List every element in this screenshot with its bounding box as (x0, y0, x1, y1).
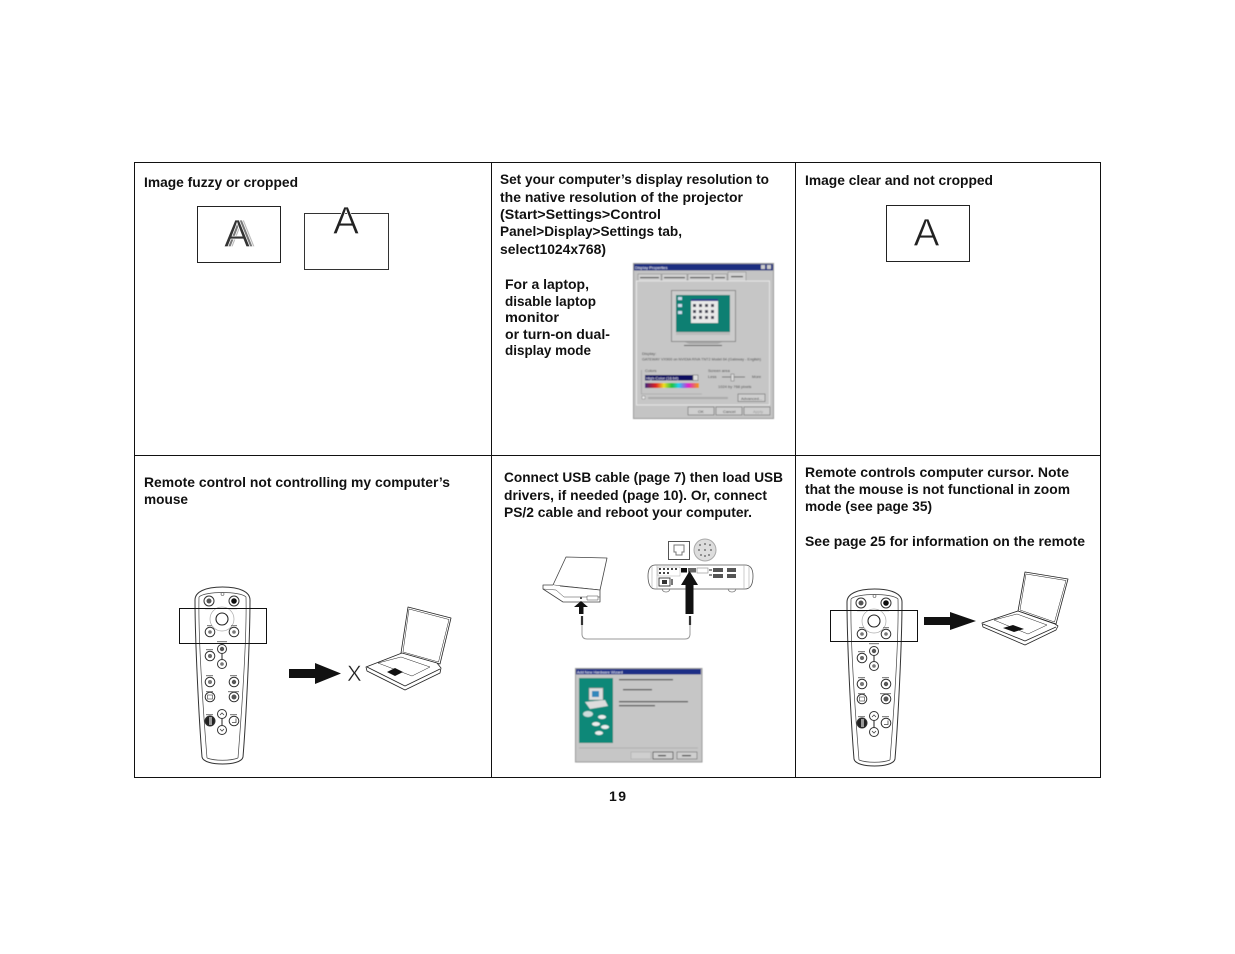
screenshot: display properties dialog: High Color (16 bit) (646, 376, 679, 380)
heading: remote problem (144, 474, 450, 507)
text: remote cursor note (805, 464, 1085, 549)
screenshot: add new hardware wizard: Add New Hardware Wizard (577, 670, 623, 674)
text: remote cursor note: that the mouse is not functional in zoom (805, 481, 1070, 497)
text: laptop note: display mode (505, 342, 591, 358)
panel: image fuzzy or cropped (144, 174, 388, 270)
heading: image fuzzy: Image fuzzy or cropped (144, 174, 298, 190)
icon: remote control (847, 589, 902, 766)
text: laptop note: monitor (505, 309, 560, 325)
icon: clear letter A (886, 206, 970, 262)
screenshot: display properties dialog: Apply (753, 409, 763, 414)
text: USB instructions: drivers, if needed (page 10). Or, connect (504, 487, 767, 503)
panel: remote controls cursor (805, 464, 1085, 766)
screenshot: display properties dialog: 1024 by 768 pixels (718, 384, 751, 389)
icon: fuzzy letter A: A (227, 213, 253, 256)
icon: cropped letter A (304, 200, 388, 270)
screenshot: display properties dialog: Cancel (723, 409, 736, 414)
screenshot: display properties dialog: Display Properties (635, 265, 667, 270)
screenshot: add new hardware wizard (576, 668, 702, 762)
text: USB instructions: PS/2 cable and reboot your computer. (504, 504, 752, 520)
arrow: remote to laptop (924, 612, 976, 630)
arrow: remote to laptop (289, 663, 341, 684)
text: laptop note (505, 276, 610, 358)
text: laptop note: disable laptop (505, 293, 596, 309)
icon: remote control (195, 587, 250, 764)
panel: remote not controlling mouse (144, 474, 451, 764)
icon: fuzzy letter A: A (229, 213, 255, 256)
text: resolution instructions: the native resolution of the projector (500, 189, 744, 205)
screenshot: display properties dialog: Screen area (708, 368, 731, 373)
page number: 19 (609, 788, 626, 804)
screenshot: display properties dialog: More (752, 374, 762, 379)
arrow: to projector USB port (681, 571, 698, 614)
screenshot: display properties dialog (634, 264, 774, 418)
screenshot: display properties dialog: GATEWAY VX900 on NVIDIA RIVA TNT2 Model 64 (Gateway - English) (642, 356, 762, 362)
highlight box on remote (180, 608, 266, 644)
text: remote cursor note: mode (see page 35) (805, 498, 932, 514)
highlight box on remote (830, 610, 918, 642)
screenshot: display properties dialog: Advanced... (741, 396, 762, 401)
icon: USB connector (668, 542, 690, 560)
icon: laptop side view (543, 557, 607, 602)
text: resolution instructions: select1024x768) (500, 241, 606, 257)
text: laptop note: or turn-on dual- (505, 326, 610, 342)
text: resolution instructions (500, 171, 769, 257)
text: resolution instructions: (Start>Settings>Control (500, 206, 661, 222)
icon: fuzzy letter A (198, 206, 280, 262)
text: resolution instructions: Panel>Display>Settings tab, (500, 223, 682, 239)
text: remote cursor note: See page 25 for information on the remote (805, 533, 1085, 549)
screenshot: display properties dialog: Display: (642, 351, 656, 356)
screenshot: display properties dialog: Less (708, 374, 716, 379)
icon: X mark: X (347, 661, 362, 686)
arrow: to laptop USB port (574, 601, 588, 614)
text: USB instructions: Connect USB cable (page 7) then load USB (504, 469, 783, 485)
USB cable (582, 616, 690, 639)
text: remote cursor note: Remote controls computer cursor. Note (805, 464, 1069, 480)
panel: connect USB cable (504, 469, 783, 762)
text: laptop note: For a laptop, (505, 276, 589, 292)
text: resolution instructions: Set your computer’s display resolution to (500, 171, 769, 187)
icon: PS/2 connector (694, 539, 716, 561)
panel: set display resolution (500, 171, 774, 418)
icon: cropped letter A: A (333, 200, 359, 243)
heading: remote problem: Remote control not controlling my computer’s (144, 474, 450, 490)
troubleshooting table grid (134, 162, 1100, 778)
heading: image clear: Image clear and not cropped (805, 172, 993, 188)
icon: projector rear (648, 565, 753, 592)
icon: fuzzy letter A: A (224, 213, 250, 256)
screenshot: display properties dialog: Colors (645, 368, 657, 373)
panel: image clear (805, 172, 993, 262)
heading: remote problem: mouse (144, 491, 188, 507)
screenshot: display properties dialog: OK (698, 409, 704, 414)
text: USB instructions (504, 469, 783, 520)
icon: laptop (982, 572, 1068, 645)
icon: laptop (366, 607, 451, 690)
icon: clear letter A: A (914, 212, 940, 255)
